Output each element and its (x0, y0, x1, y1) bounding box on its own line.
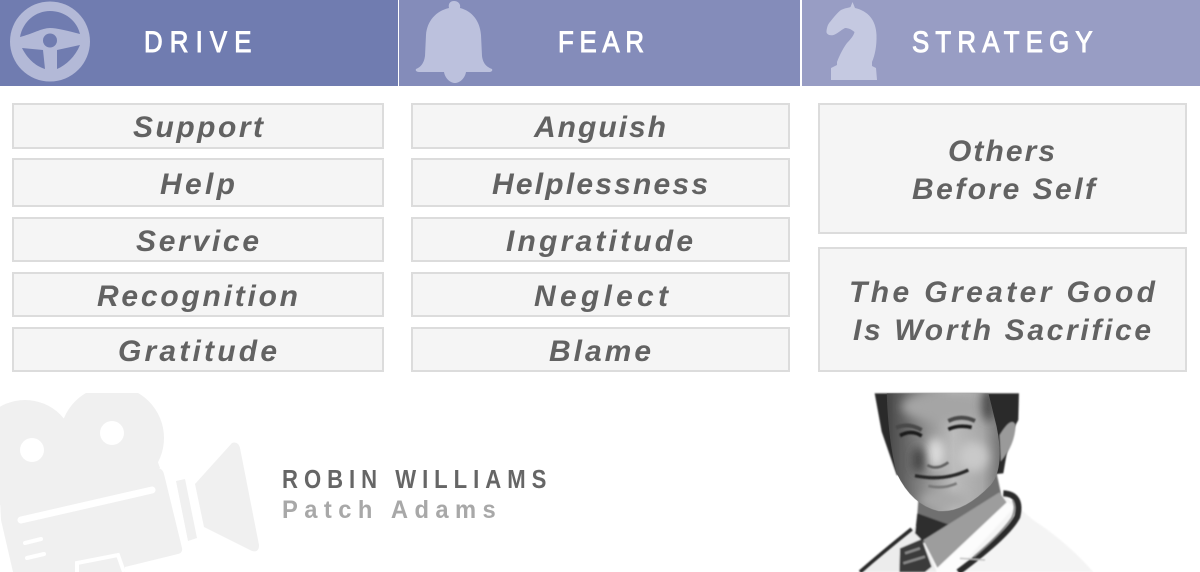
stethoscope (860, 493, 1018, 572)
caption: actor and film (282, 465, 546, 524)
panel: strategy header (802, 0, 1200, 86)
item: anguish (412, 104, 789, 148)
item: others before self (819, 104, 1186, 233)
item: anguish: Anguish (533, 111, 666, 144)
collar (923, 492, 1007, 568)
item: ingratitude: Ingratitude (506, 225, 693, 258)
item: support: Support (133, 111, 265, 144)
item: help: Help (160, 168, 235, 201)
item: the greater good (819, 248, 1186, 371)
panel: drive list (13, 104, 383, 371)
panel: fear list (412, 104, 789, 371)
heading: fear: FEAR (558, 25, 644, 58)
icon: film camera (0, 386, 259, 572)
tie (899, 539, 932, 572)
panel: strategy list (819, 104, 1186, 371)
item: ingratitude (412, 218, 789, 261)
heading: strategy: STRATEGY (912, 25, 1093, 58)
icon: chess knight (826, 2, 877, 80)
item: support (13, 104, 383, 148)
item: recognition: Recognition (97, 280, 298, 313)
item: helplessness: Helplessness (492, 168, 708, 201)
shirt (925, 500, 1015, 572)
cheek light (958, 442, 988, 472)
face (883, 388, 1000, 515)
icon: bell (416, 1, 492, 83)
item: service: Service (136, 225, 259, 258)
neck (916, 473, 1002, 543)
item: blame (412, 328, 789, 371)
item: service (13, 218, 383, 261)
brows and eyes (896, 418, 975, 487)
item: others before self: Before Self (912, 173, 1098, 206)
icon: steering wheel (10, 2, 90, 82)
smile (915, 470, 968, 478)
photo: portrait of doctor with stethoscope (860, 388, 1093, 572)
item: gratitude (13, 328, 383, 371)
coat (860, 473, 1093, 572)
ear (999, 422, 1016, 462)
item: neglect: Neglect (534, 280, 670, 313)
item: help (13, 159, 383, 206)
film title: Patch Adams (282, 496, 496, 524)
heading: drive: DRIVE (144, 25, 252, 58)
item: the greater good: Is Worth Sacrifice (853, 314, 1151, 347)
item: others before self: Others (948, 135, 1055, 168)
item: gratitude: Gratitude (118, 335, 277, 368)
nose shadow (912, 447, 924, 473)
item: neglect (412, 273, 789, 316)
actor name: ROBIN WILLIAMS (282, 465, 546, 494)
hair (875, 393, 1019, 475)
panel: drive header (0, 0, 398, 86)
nose light (926, 438, 945, 468)
nose shading (927, 462, 948, 467)
item: helplessness (412, 159, 789, 206)
forehead shading (902, 392, 985, 422)
item: blame: Blame (549, 335, 651, 368)
item: the greater good: The Greater Good (849, 276, 1156, 309)
panel: fear header (399, 0, 800, 86)
item: recognition (13, 273, 383, 316)
